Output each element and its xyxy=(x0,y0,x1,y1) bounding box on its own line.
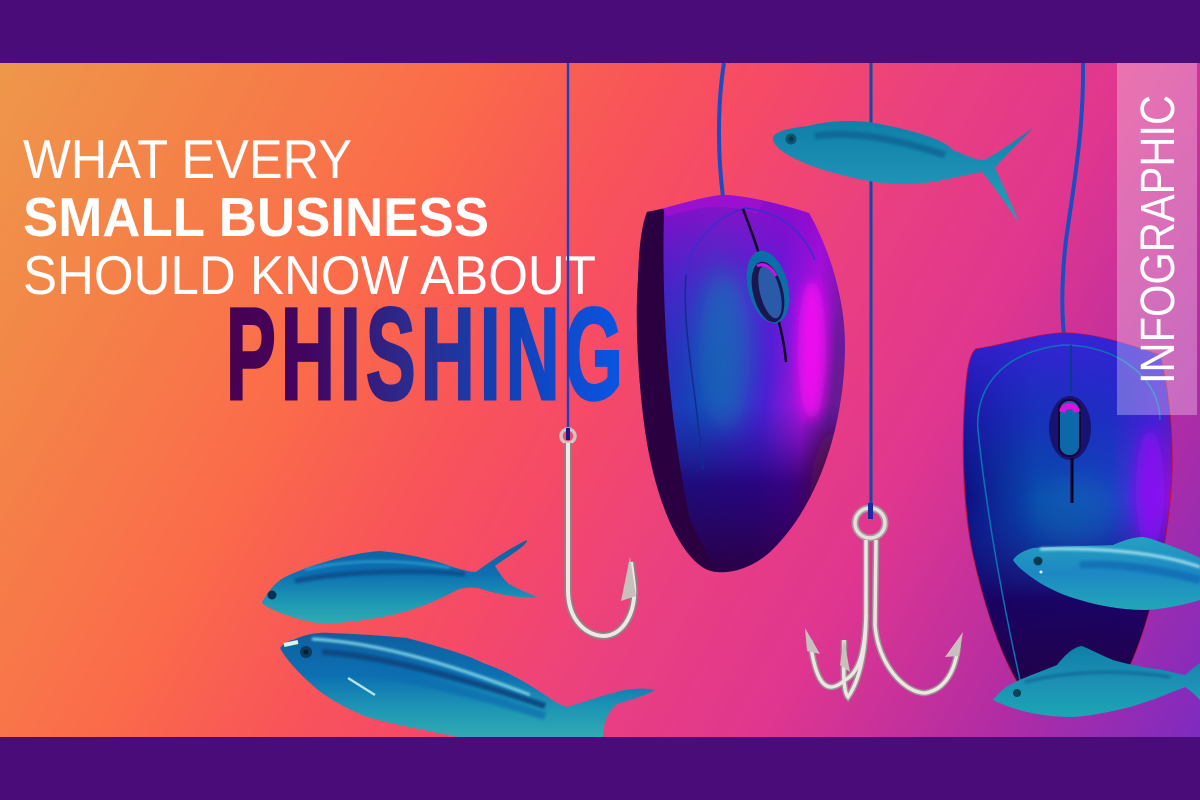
heading line: what every: WHAT EVERY xyxy=(23,128,352,190)
icon: treble hook xyxy=(805,503,963,697)
top band xyxy=(0,0,1200,63)
computer mouse: right xyxy=(960,330,1175,705)
heading word: phishing: PHISHING xyxy=(226,280,628,427)
fishing line: treble hook xyxy=(870,63,872,510)
icon: single fish hook xyxy=(561,428,636,636)
heading line: should know about: SHOULD KNOW ABOUT xyxy=(23,244,596,306)
side label panel xyxy=(1117,63,1197,415)
heading xyxy=(23,128,596,306)
fish: middle left xyxy=(262,540,537,623)
fish: upper right xyxy=(1013,537,1200,610)
fish: top centre xyxy=(773,121,1033,223)
fish: bottom left xyxy=(280,633,655,737)
mouse wheel xyxy=(1049,345,1091,503)
bottom band xyxy=(0,737,1200,800)
mouse cable: right mouse xyxy=(1062,63,1083,335)
heading line: small business: SMALL BUSINESS xyxy=(23,186,489,248)
side label: infographic: INFOGRAPHIC xyxy=(1132,95,1185,384)
mouse cable: left mouse xyxy=(719,63,724,197)
fish: lower right xyxy=(993,646,1200,717)
computer mouse: left xyxy=(636,195,845,572)
mouse wheel xyxy=(740,246,796,328)
fishing line: hook one xyxy=(567,63,569,430)
mouse seam xyxy=(743,209,786,362)
